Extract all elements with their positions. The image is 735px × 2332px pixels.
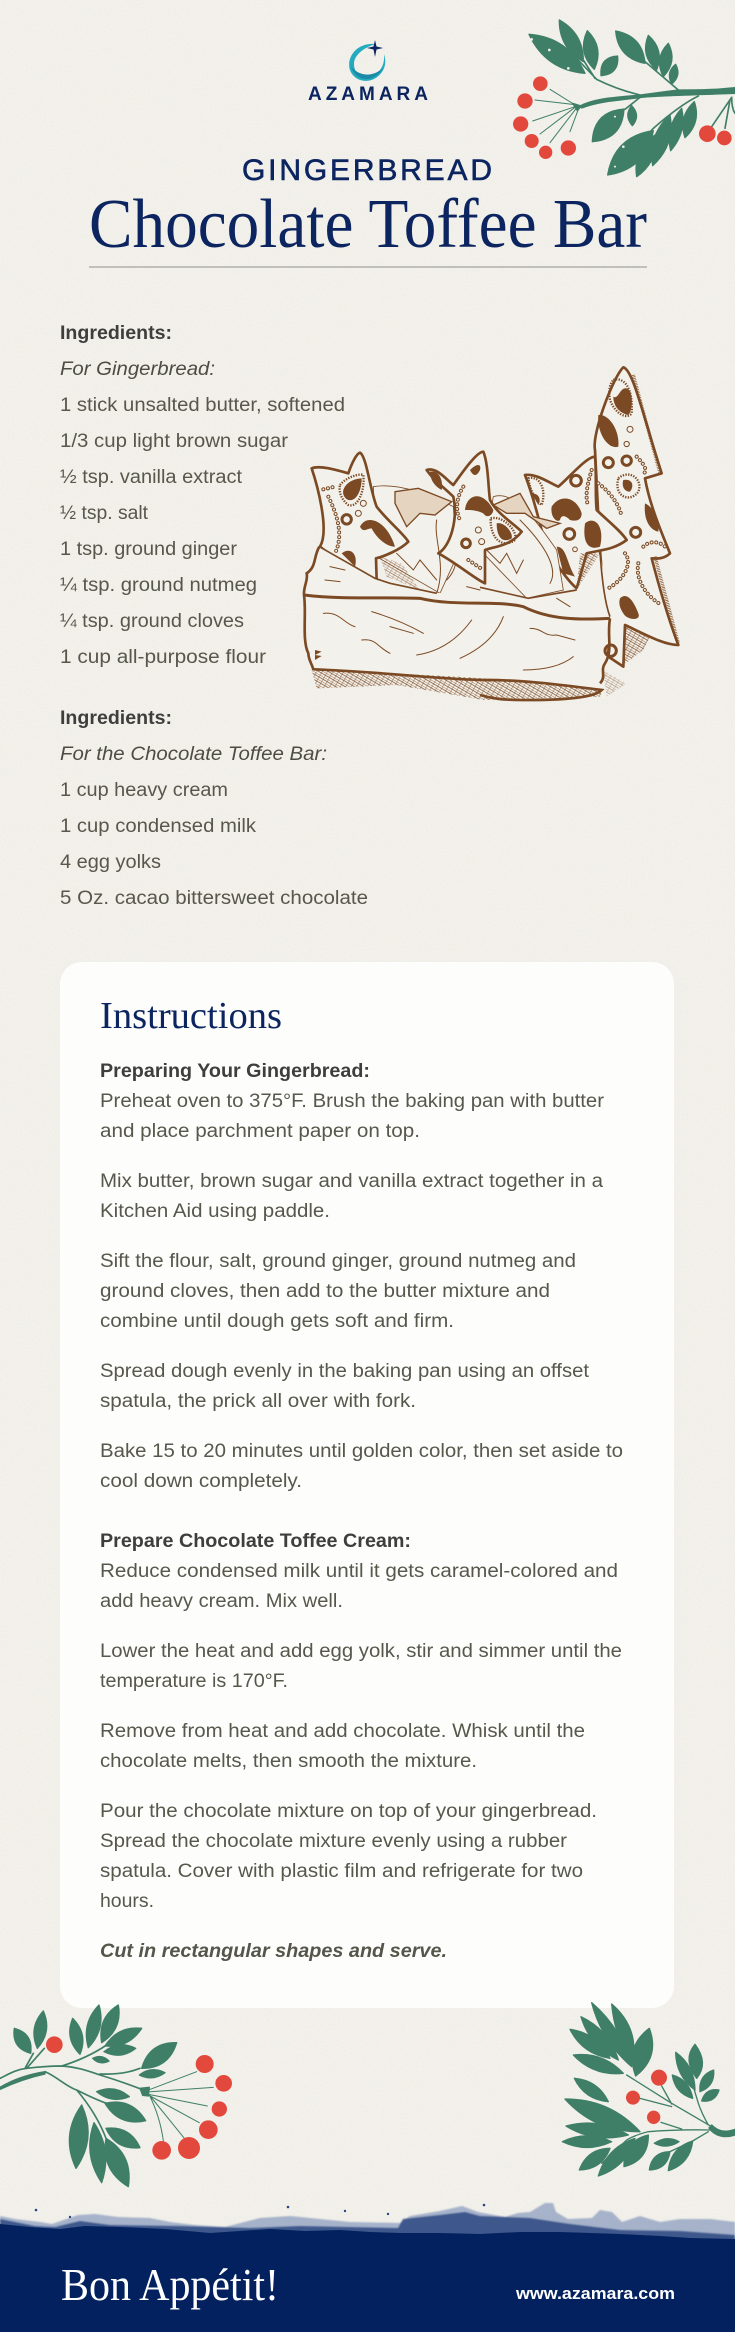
text block: preparing your gingerbread: Kitchen Aid using paddle. — [100, 1201, 330, 1222]
logo: Azamara — [308, 40, 428, 105]
ingredients: for gingerbread — [60, 323, 345, 668]
text block: prepare chocolate toffee cream: hours. — [100, 1891, 154, 1912]
wordmark: AZAMARA — [308, 84, 428, 105]
specks — [35, 2204, 485, 2218]
illustration: gingerbread toffee bar — [304, 367, 678, 700]
ingredients: for the chocolate toffee bar: For the Chocolate Toffee Bar: — [60, 744, 327, 765]
sprig: bottom right — [562, 2003, 735, 2176]
text block: prepare chocolate toffee cream: Lower the heat and add egg yolk, stir and simmer until the — [100, 1641, 622, 1662]
ingredients: for the chocolate toffee bar: 1 cup condensed milk — [60, 816, 257, 837]
ingredients: for the chocolate toffee bar — [60, 708, 368, 909]
text block: prepare chocolate toffee cream: spatula. Cover with plastic film and refrigerate for two — [100, 1861, 583, 1882]
text block: prepare chocolate toffee cream: Remove from heat and add chocolate. Whisk until the — [100, 1721, 585, 1742]
wrapped toffee pieces — [373, 486, 602, 598]
leaves — [562, 2003, 719, 2176]
footer band — [0, 2203, 735, 2332]
text block: preparing your gingerbread: Preparing Your Gingerbread: — [100, 1061, 370, 1082]
title: Chocolate Toffee Bar: Chocolate Toffee Bar — [89, 186, 647, 263]
ingredients: for gingerbread: 1 cup all-purpose flour — [60, 647, 267, 668]
text block: preparing your gingerbread: spatula, the prick all over with fork. — [100, 1391, 416, 1412]
text block: preparing your gingerbread — [100, 1061, 623, 1492]
icon: star — [367, 40, 383, 57]
text block: prepare chocolate toffee cream: chocolate melts, then smooth the mixture. — [100, 1751, 477, 1772]
watercolor edge — [0, 2203, 735, 2245]
toffee bar top and front — [304, 547, 627, 700]
panel background — [60, 962, 674, 2008]
text block: prepare chocolate toffee cream: Spread the chocolate mixture evenly using a rubber — [100, 1831, 568, 1852]
ingredients: for the chocolate toffee bar: 1 cup heavy cream — [60, 780, 228, 801]
icon: crescent swoosh — [349, 44, 385, 81]
leaves — [14, 2005, 177, 2187]
text block: preparing your gingerbread: and place parchment paper on top. — [100, 1121, 420, 1142]
cookie: tree — [595, 367, 678, 667]
text block: preparing your gingerbread: Preheat oven to 375°F. Brush the baking pan with butter — [100, 1091, 605, 1112]
cookie: star three — [525, 457, 627, 588]
text block: prepare chocolate toffee cream: Pour the chocolate mixture on top of your gingerbread. — [100, 1801, 597, 1822]
text block: preparing your gingerbread: Mix butter, brown sugar and vanilla extract together in a — [100, 1171, 603, 1192]
ingredients: for the chocolate toffee bar: 5 Oz. cacao bittersweet chocolate — [60, 888, 368, 909]
text block: preparing your gingerbread: combine until dough gets soft and firm. — [100, 1311, 454, 1332]
ingredients: for gingerbread: 1/3 cup light brown sugar — [60, 431, 289, 452]
solid band — [0, 2224, 735, 2332]
ingredients: for gingerbread: 1 stick unsalted butter, softened — [60, 395, 345, 416]
ingredients: for gingerbread: ¼ tsp. ground cloves — [60, 611, 244, 632]
berries — [626, 2070, 667, 2124]
text block: prepare chocolate toffee cream: temperature is 170°F. — [100, 1671, 288, 1692]
stems — [0, 2045, 213, 2160]
text block: preparing your gingerbread: Sift the flour, salt, ground ginger, ground nutmeg and — [100, 1251, 576, 1272]
text block: prepare chocolate toffee cream: Prepare Chocolate Toffee Cream: — [100, 1531, 411, 1552]
text block: preparing your gingerbread: ground cloves, then add to the butter mixture and — [100, 1281, 550, 1302]
ingredients: for gingerbread: ¼ tsp. ground nutmeg — [60, 575, 257, 596]
text block: preparing your gingerbread: cool down completely. — [100, 1471, 302, 1492]
leaf speckles — [530, 38, 625, 168]
ingredients: for gingerbread: ½ tsp. salt — [60, 503, 149, 524]
sprig: top right — [513, 20, 735, 177]
ingredients: for gingerbread: 1 tsp. ground ginger — [60, 539, 238, 560]
sprig: bottom left — [0, 2005, 232, 2187]
closing message: Bon Appétit! — [61, 2259, 279, 2310]
cookie: star one — [312, 453, 408, 580]
ingredients: for gingerbread: Ingredients: — [60, 323, 172, 344]
ingredients: for gingerbread: ½ tsp. vanilla extract — [60, 467, 243, 488]
berries — [513, 76, 732, 159]
heading: Gingerbread: GINGERBREAD — [242, 154, 492, 187]
ingredients: for the chocolate toffee bar: Ingredients: — [60, 708, 172, 729]
text block: preparing your gingerbread: Bake 15 to 20 minutes until golden color, then set aside to — [100, 1441, 623, 1462]
text block: prepare chocolate toffee cream: add heavy cream. Mix well. — [100, 1591, 343, 1612]
panel: instructions — [60, 962, 674, 2008]
text block: prepare chocolate toffee cream — [100, 1531, 622, 1912]
berries — [46, 2036, 232, 2160]
heading: Instructions: Instructions — [100, 995, 282, 1037]
website: www.azamara.com — [515, 2284, 675, 2303]
leaves — [529, 20, 696, 177]
cookie: star two — [427, 452, 522, 583]
closing note: Cut in rectangular shapes and serve. — [100, 1941, 447, 1962]
stems — [602, 2075, 735, 2163]
ingredients: for the chocolate toffee bar: 4 egg yolks — [60, 852, 161, 873]
ingredients: for gingerbread: For Gingerbread: — [60, 359, 215, 380]
text block: preparing your gingerbread: Spread dough evenly in the baking pan using an offset — [100, 1361, 590, 1382]
stems — [533, 53, 735, 150]
text block: prepare chocolate toffee cream: Reduce condensed milk until it gets caramel-colored and — [100, 1561, 618, 1582]
